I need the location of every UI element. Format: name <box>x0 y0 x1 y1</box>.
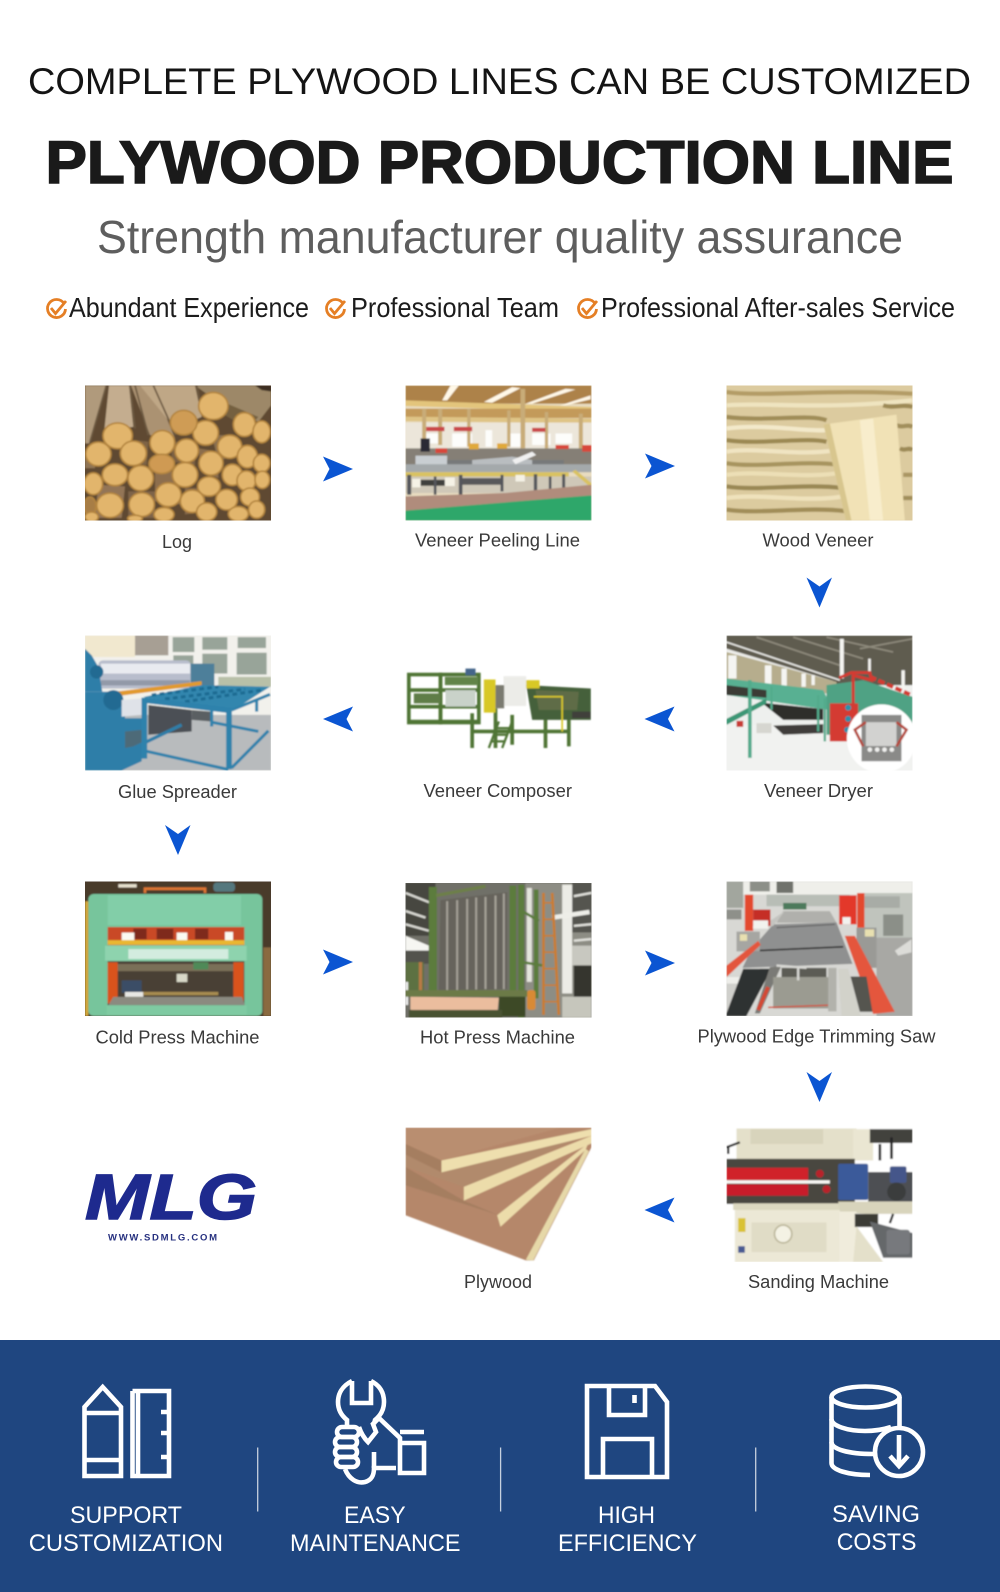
icon: pencil and ruler <box>84 1387 169 1476</box>
title: complete plywood lines: COMPLETE PLYWOOD LINES CAN BE CUSTOMIZED <box>28 60 971 102</box>
photo: stacked plywood sheets <box>406 1128 592 1262</box>
feature tags row <box>48 292 955 323</box>
step: hot press machine <box>406 883 592 1048</box>
label: saving costs: SAVING <box>832 1501 920 1528</box>
icon: orange check 1 <box>48 299 66 317</box>
icon: orange check 3 <box>579 299 597 317</box>
step: veneer peeling line <box>406 386 592 550</box>
arrow: trimming saw to sanding machine <box>806 1072 832 1102</box>
photo: veneer dryer with inset <box>726 636 912 770</box>
step: cold press machine <box>85 882 271 1048</box>
tag: professional after-sales service: Professional After-sales Service <box>601 292 955 323</box>
label: veneer dryer: Veneer Dryer <box>764 780 873 801</box>
arrow: peeling line to wood veneer <box>645 454 675 478</box>
photo: green cold press <box>85 882 271 1016</box>
arrow: hot press to trimming saw <box>645 950 675 976</box>
arrow: glue spreader to cold press <box>165 825 190 855</box>
tag: abundant experience: Abundant Experience <box>69 292 309 323</box>
label: easy maintenance: EASY <box>344 1502 406 1529</box>
photo: veneer composer machine <box>406 668 592 750</box>
step: glue spreader <box>85 636 271 802</box>
icon: orange check 2 <box>327 299 345 317</box>
label: high efficiency: HIGH <box>598 1502 655 1529</box>
step: veneer dryer <box>726 636 916 801</box>
photo: wood veneer stacks <box>726 386 912 520</box>
arrow: log to veneer peeling line <box>323 456 353 482</box>
label: sanding machine: Sanding Machine <box>748 1271 889 1292</box>
label: support customization: CUSTOMIZATION <box>29 1530 223 1557</box>
label: easy maintenance <box>290 1502 460 1557</box>
label: saving costs <box>832 1501 920 1556</box>
footer banner <box>0 1340 1000 1592</box>
step: log <box>84 386 271 552</box>
icon: wrench, fist and house <box>335 1381 424 1482</box>
step: veneer composer <box>409 669 591 801</box>
photo: hot press tower <box>406 883 592 1018</box>
icon: database stack with download circle <box>832 1386 923 1476</box>
label: cold press machine: Cold Press Machine <box>96 1026 260 1048</box>
label: log: Log <box>162 531 192 552</box>
label: high efficiency <box>558 1502 697 1557</box>
label: saving costs: COSTS <box>837 1529 916 1556</box>
logo url: WWW.SDMLG.COM <box>108 1232 217 1244</box>
logo: MLG <box>85 1161 257 1244</box>
step: wood veneer <box>726 386 912 550</box>
heading: plywood production line: PLYWOOD PRODUCTION LINE <box>46 129 954 196</box>
photo: sanding machine <box>726 1128 912 1262</box>
label: plywood: Plywood <box>464 1271 532 1292</box>
label: glue spreader: Glue Spreader <box>118 781 237 802</box>
arrow: wood veneer to dryer <box>806 578 832 608</box>
label: veneer composer: Veneer Composer <box>424 780 572 801</box>
photo: factory peeling line <box>406 386 592 520</box>
photo: log pile <box>85 386 271 520</box>
label: high efficiency: EFFICIENCY <box>558 1530 697 1557</box>
photo: edge trimming saw <box>726 882 912 1016</box>
label: veneer peeling line: Veneer Peeling Line <box>415 530 580 550</box>
label: plywood edge trimming saw: Plywood Edge Trimming Saw <box>698 1026 936 1046</box>
step: sanding machine <box>726 1128 912 1292</box>
subtitle: strength manufacturer: Strength manufacturer quality assurance <box>97 211 903 263</box>
arrow: composer to glue spreader <box>323 706 353 732</box>
label: easy maintenance: MAINTENANCE <box>290 1530 460 1557</box>
photo: glue spreader machine <box>85 636 271 770</box>
arrow: cold press to hot press <box>323 950 353 974</box>
step: plywood <box>406 1128 592 1292</box>
icon: floppy disk <box>587 1386 667 1477</box>
step: plywood edge trimming saw <box>698 882 936 1046</box>
tag: professional team: Professional Team <box>351 292 559 323</box>
arrow: sanding machine to plywood <box>644 1198 674 1222</box>
label: support customization: SUPPORT <box>70 1502 182 1529</box>
logo mark: MLG <box>85 1161 257 1233</box>
label: support customization <box>29 1502 223 1557</box>
label: hot press machine: Hot Press Machine <box>420 1026 575 1048</box>
arrow: dryer to composer <box>644 706 674 732</box>
label: wood veneer: Wood Veneer <box>762 530 874 550</box>
